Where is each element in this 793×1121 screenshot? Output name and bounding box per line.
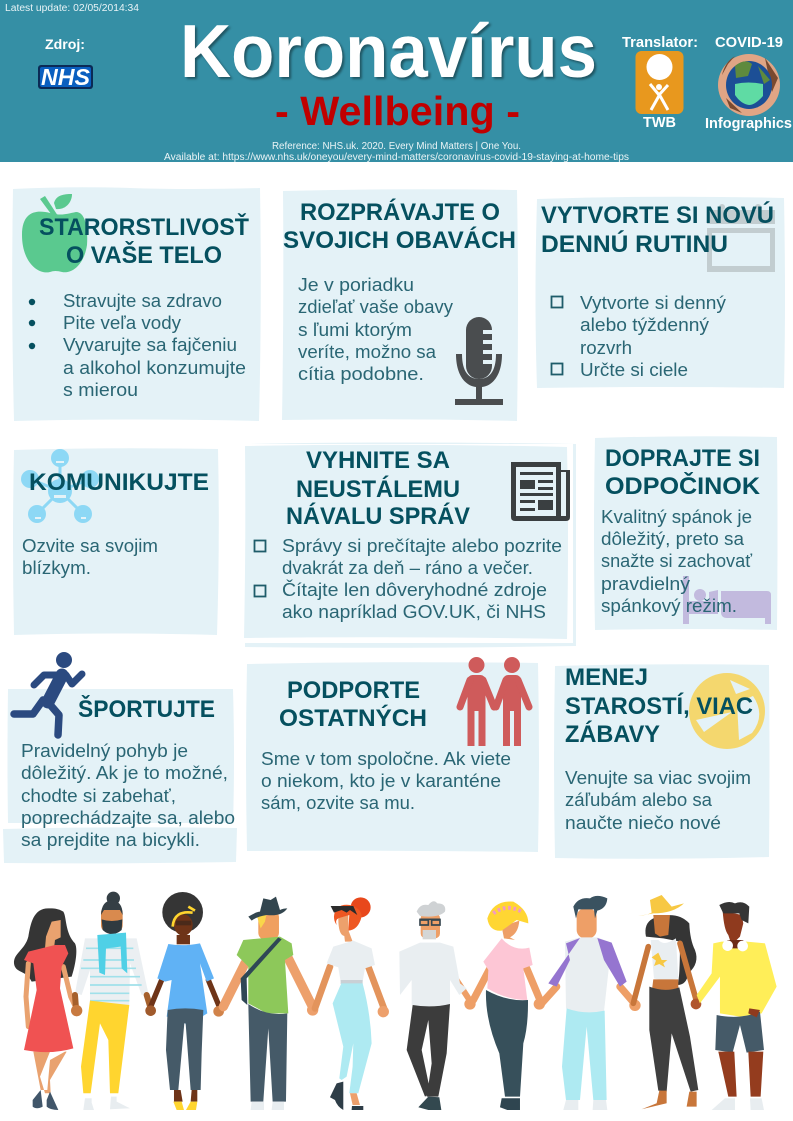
heading: ROZPRÁVAJTE O	[300, 198, 500, 226]
checklist: ako napríklad GOV.UK, či NHS	[282, 602, 546, 622]
translator label: Translator:	[622, 35, 698, 51]
heading: PODPORTE	[287, 677, 420, 704]
heading: VYHNITE SA	[306, 447, 450, 474]
heading	[286, 447, 470, 530]
body text: pravdielný	[601, 574, 690, 594]
heading	[39, 213, 249, 269]
icon: runner	[14, 652, 82, 735]
heading: O VAŠE TELO	[66, 241, 222, 269]
heading: ZÁBAVY	[565, 720, 660, 748]
checklist: alebo týždenný	[580, 315, 709, 335]
heading	[279, 677, 427, 732]
checklist: Čítajte len dôveryhodné zdroje	[282, 579, 547, 600]
body text: Pravidelný pohyb je	[21, 741, 188, 761]
panel: get rest	[594, 436, 778, 630]
body text	[22, 536, 158, 578]
person 1: woman in red dress	[14, 908, 77, 1110]
heading: STAROSTÍ, VIAC	[565, 692, 753, 720]
illustration: ten people holding hands	[14, 892, 777, 1110]
icon: two people holding hands	[460, 657, 529, 746]
body text: poprechádzajte sa, alebo	[21, 808, 235, 828]
bullet list: a alkohol konzumujte	[63, 358, 246, 378]
panel: avoid news overload	[243, 442, 576, 648]
body text: Je v poriadku	[298, 275, 414, 295]
reference url: Available at: https://www.nhs.uk/oneyou/every-mind-matters/coronavirus-covid-19-staying-at-home-tips	[164, 152, 629, 163]
heading: SVOJICH OBAVÁCH	[283, 226, 516, 254]
body text: chodte si zabehať,	[21, 786, 176, 806]
person 8: man in purple raglan shirt	[542, 896, 641, 1110]
icon: apple	[22, 194, 87, 272]
person 10: man in yellow sweater	[697, 902, 777, 1110]
heading: ŠPORTUJTE	[78, 695, 215, 723]
bullet list: Stravujte sa zdravo	[63, 291, 222, 311]
icon: network of people	[21, 449, 99, 523]
infographics label: Infographics	[705, 115, 792, 132]
header band	[0, 0, 793, 163]
body text: blízkym.	[22, 558, 91, 578]
checklist: Správy si prečítajte alebo pozrite	[282, 536, 562, 556]
body text: naučte niečo nové	[565, 813, 721, 833]
person 9: woman in yellow hat	[633, 895, 701, 1109]
body text: sa prejdite na bicykli.	[21, 830, 200, 850]
panel: body care	[12, 187, 261, 421]
bullet list: Vyvarujte sa fajčeniu	[63, 335, 237, 355]
icon: microphone	[455, 317, 503, 405]
body text: Ozvite sa svojim	[22, 536, 158, 556]
heading: OSTATNÝCH	[279, 704, 427, 732]
title: Koronavírus	[180, 9, 597, 93]
icon: NHS logo: NHS	[41, 64, 91, 90]
panel: daily routine	[536, 197, 785, 388]
heading: DOPRAJTE SI	[605, 445, 760, 472]
person 6: older man with glasses	[399, 901, 476, 1110]
body text: zdieľať vaše obavy	[298, 297, 453, 317]
heading: NEUSTÁLEMU	[296, 475, 460, 503]
panel: talk about worries	[282, 189, 518, 421]
body text: sám, ozvite sa mu.	[261, 793, 415, 813]
body text: záľubám alebo sa	[565, 790, 713, 810]
body text	[565, 768, 751, 833]
reference line: Reference: NHS.uk. 2020. Every Mind Matters | One You.	[272, 141, 521, 152]
body text	[21, 741, 235, 850]
heading	[283, 198, 516, 254]
body text: Venujte sa viac svojim	[565, 768, 751, 788]
checklist: dvakrát za deň – ráno a večer.	[282, 558, 533, 578]
latest update note: Latest update: 02/05/2014:34	[5, 3, 139, 14]
heading	[541, 201, 774, 258]
heading: DENNÚ RUTINU	[541, 230, 728, 258]
icon: bed	[683, 576, 771, 624]
person 3: woman with afro in blue top	[145, 892, 224, 1110]
body text: dôležitý. Ak je to možné,	[21, 763, 228, 783]
body text	[298, 275, 453, 384]
checklist: Vytvorte si denný	[580, 293, 726, 313]
heading: VYTVORTE SI NOVÚ	[541, 201, 774, 229]
checklist	[552, 293, 726, 380]
body text: s ľumi ktorým	[298, 320, 412, 340]
body text	[261, 749, 511, 813]
icon: TWB logo	[636, 51, 684, 114]
heading: ODPOČINOK	[605, 472, 761, 500]
heading: MENEJ	[565, 664, 648, 691]
body text: o niekom, kto je v karanténe	[261, 771, 501, 791]
panel: less worry more fun	[554, 664, 770, 859]
icon: newspaper	[511, 462, 570, 521]
body text: Sme v tom spoločne. Ak viete	[261, 749, 511, 769]
subtitle: - Wellbeing -	[275, 88, 520, 134]
panel: communicate	[13, 448, 219, 635]
person 7: woman with flower crown and pink top	[473, 902, 545, 1110]
heading: KOMUNIKUJTE	[29, 469, 209, 496]
body text: cítia podobne.	[298, 364, 424, 384]
covid infographics label: COVID-19	[715, 35, 783, 51]
source label: Zdroj:	[45, 36, 85, 52]
icon: calendar	[707, 204, 775, 272]
body text: snažte si zachovať	[601, 551, 752, 571]
panel: exercise	[3, 652, 237, 863]
body text	[601, 507, 752, 616]
body text: dôležitý, preto sa	[601, 529, 745, 549]
person 5: woman with red hair and white shirt	[315, 897, 389, 1110]
body text: veríte, možno sa	[298, 342, 437, 362]
checklist: Určte si ciele	[580, 360, 688, 380]
heading: NÁVALU SPRÁV	[286, 502, 470, 530]
person 4: man in hat and green shirt	[223, 897, 318, 1110]
TWB label: TWB	[643, 114, 676, 131]
checklist: rozvrh	[580, 338, 632, 358]
person 2: bearded man in striped sweater	[71, 892, 151, 1110]
body text: spánkový režim.	[601, 596, 737, 616]
heading	[605, 445, 761, 500]
checklist	[254, 536, 562, 622]
body text: Kvalitný spánok je	[601, 507, 752, 527]
bullet list	[29, 291, 246, 400]
bullet list: Pite veľa vody	[63, 313, 181, 333]
panel: support others	[246, 657, 539, 852]
heading	[565, 664, 753, 748]
heading: STARORSTLIVOSŤ	[39, 213, 249, 241]
bullet list: s mierou	[63, 380, 138, 400]
icon: beach ball	[689, 673, 765, 749]
icon: globe with mask	[718, 54, 780, 116]
